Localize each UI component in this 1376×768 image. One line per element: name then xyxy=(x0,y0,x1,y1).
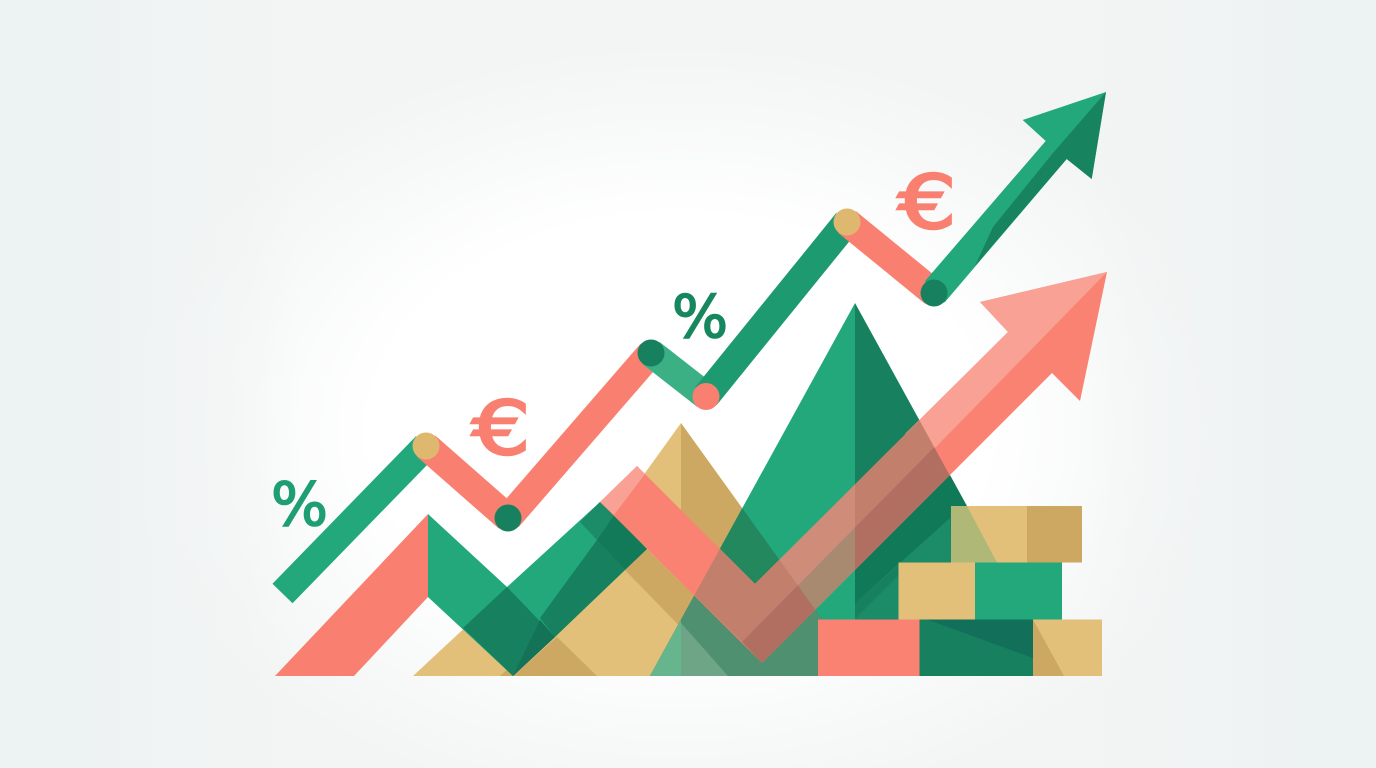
line segment: green start xyxy=(282,446,426,594)
salmon arrow xyxy=(600,272,1107,676)
green arrow xyxy=(925,92,1106,306)
euro symbol upper: € xyxy=(898,159,956,246)
rising line with nodes xyxy=(282,92,1106,594)
euro symbol lower: € xyxy=(472,385,530,472)
node markers xyxy=(412,208,948,532)
line segment: salmon up xyxy=(508,353,651,518)
percent symbol upper: % xyxy=(672,282,728,351)
line segment: salmon down xyxy=(426,446,508,518)
green zigzag band xyxy=(428,502,647,676)
salmon wedge on the left xyxy=(275,514,428,676)
line segment: light green down xyxy=(651,353,706,396)
gold mountain xyxy=(413,423,863,676)
percent symbol lower: % xyxy=(271,470,328,540)
line segment: salmon down to final node xyxy=(847,222,934,293)
line segment: dark green up xyxy=(706,222,847,396)
tall green mountain xyxy=(650,303,1060,676)
stacked blocks xyxy=(818,506,1102,676)
illustration: rising finance chart xyxy=(272,92,1107,676)
mountain overlap shading xyxy=(650,508,822,676)
